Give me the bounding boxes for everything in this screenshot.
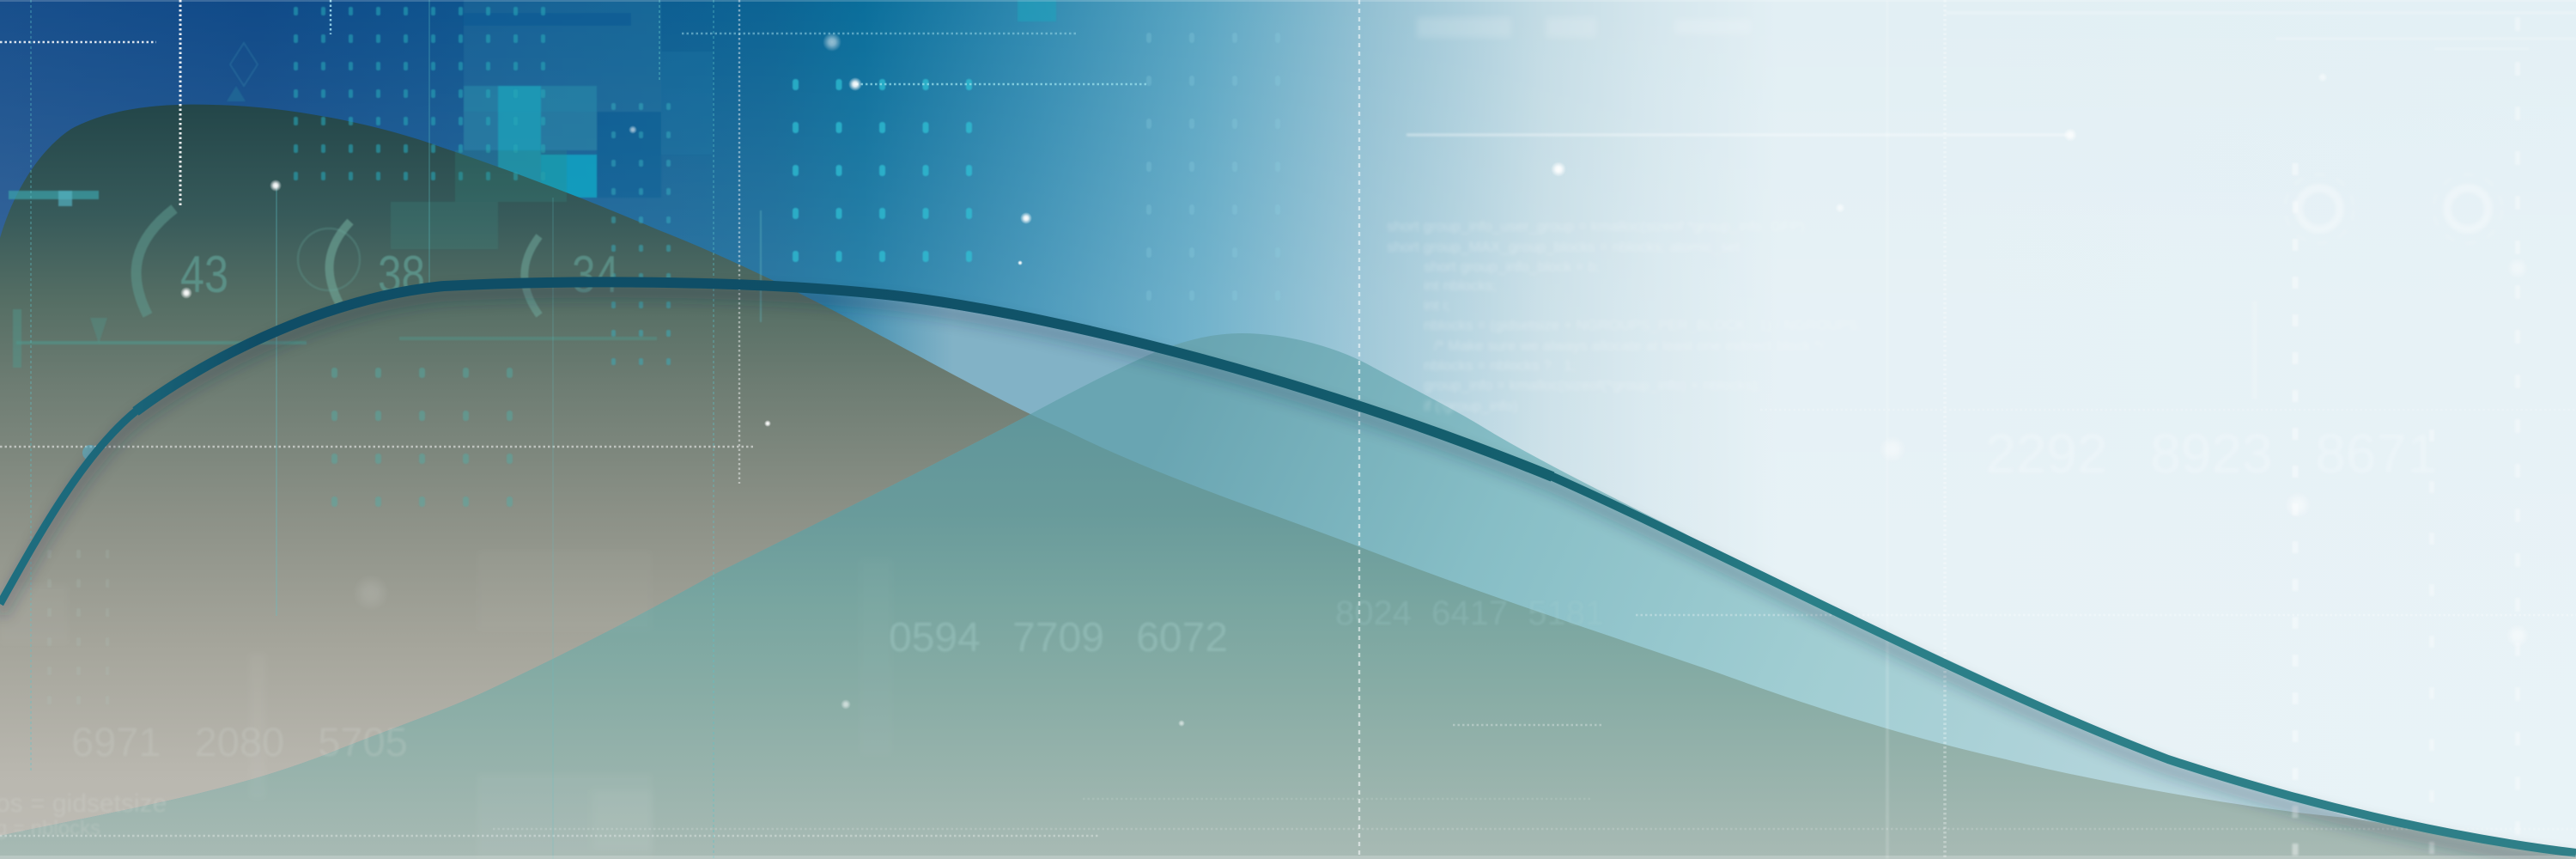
gauge: 38: [298, 222, 425, 303]
dot grids: [47, 7, 1284, 713]
background pixel blocks: [464, 0, 1056, 206]
faint white rules on right: [1406, 0, 2576, 859]
trend line: [0, 282, 2576, 853]
gauge: 43: [137, 209, 228, 315]
curve: teal distribution: [0, 333, 2576, 859]
blurred code listing: int nblocks;: [1424, 277, 1497, 294]
blurred code listing: nblocks = nblocks ? : 1;: [1424, 357, 1576, 374]
thin guide lines: teal: [31, 0, 714, 859]
lighter area beneath trend line: [773, 283, 1552, 687]
blurred heading bars top centre: [1417, 17, 1752, 38]
blurred code listing: if (!group_info): [1424, 398, 1518, 414]
faint data blocks on lower curves: [0, 550, 893, 859]
number string: 2292 8923 8671: 2292 8923 8671: [1985, 423, 2438, 484]
code fragment: lower left: [0, 789, 167, 840]
number string: 8024 6417 5181: 8024 6417 5181: [1335, 594, 1604, 632]
code fragment: lower left: os = gidsetsize: [0, 789, 167, 818]
number string: 0594 7709 6072: 0594 7709 6072: [889, 615, 1228, 661]
curve overlap region: [0, 414, 2574, 859]
trend line shadow: [0, 292, 2576, 859]
teal blocks and scale bars on olive curve: [9, 43, 762, 368]
blurred code listing: nblocks = (gidsetsize + NGROUPS_PER_BLOCK - 1) / NGROUPS;: [1424, 317, 1862, 333]
blurred code listing: /* Make sure we always allocate at least one indirect block */: [1434, 338, 1825, 354]
blurred code listing: [1387, 218, 1862, 414]
gauge: 43: 43: [180, 246, 228, 303]
gauge: 38: 38: [378, 246, 425, 303]
blurred code listing: short group_MAX_group_blocks = nblocks; atomic_set: [1387, 239, 1741, 255]
glowing nodes: [82, 33, 2530, 727]
blurred code listing: short group_info_user_group = kmalloc(sizeof *group_info, GFP): [1387, 218, 1805, 235]
blurred code listing: int i;: [1424, 297, 1450, 314]
gauge: 34: [525, 236, 619, 315]
number string: 6971 2080 5705: 6971 2080 5705: [71, 719, 408, 765]
rings: upper right: [2285, 174, 2502, 243]
blurred code listing: short group_info_block = b;: [1424, 259, 1601, 275]
blurred code listing: group_info = kmalloc(sizeof(*group_info) + nblocks);: [1424, 377, 1761, 393]
gauge: 34: 34: [572, 246, 619, 303]
